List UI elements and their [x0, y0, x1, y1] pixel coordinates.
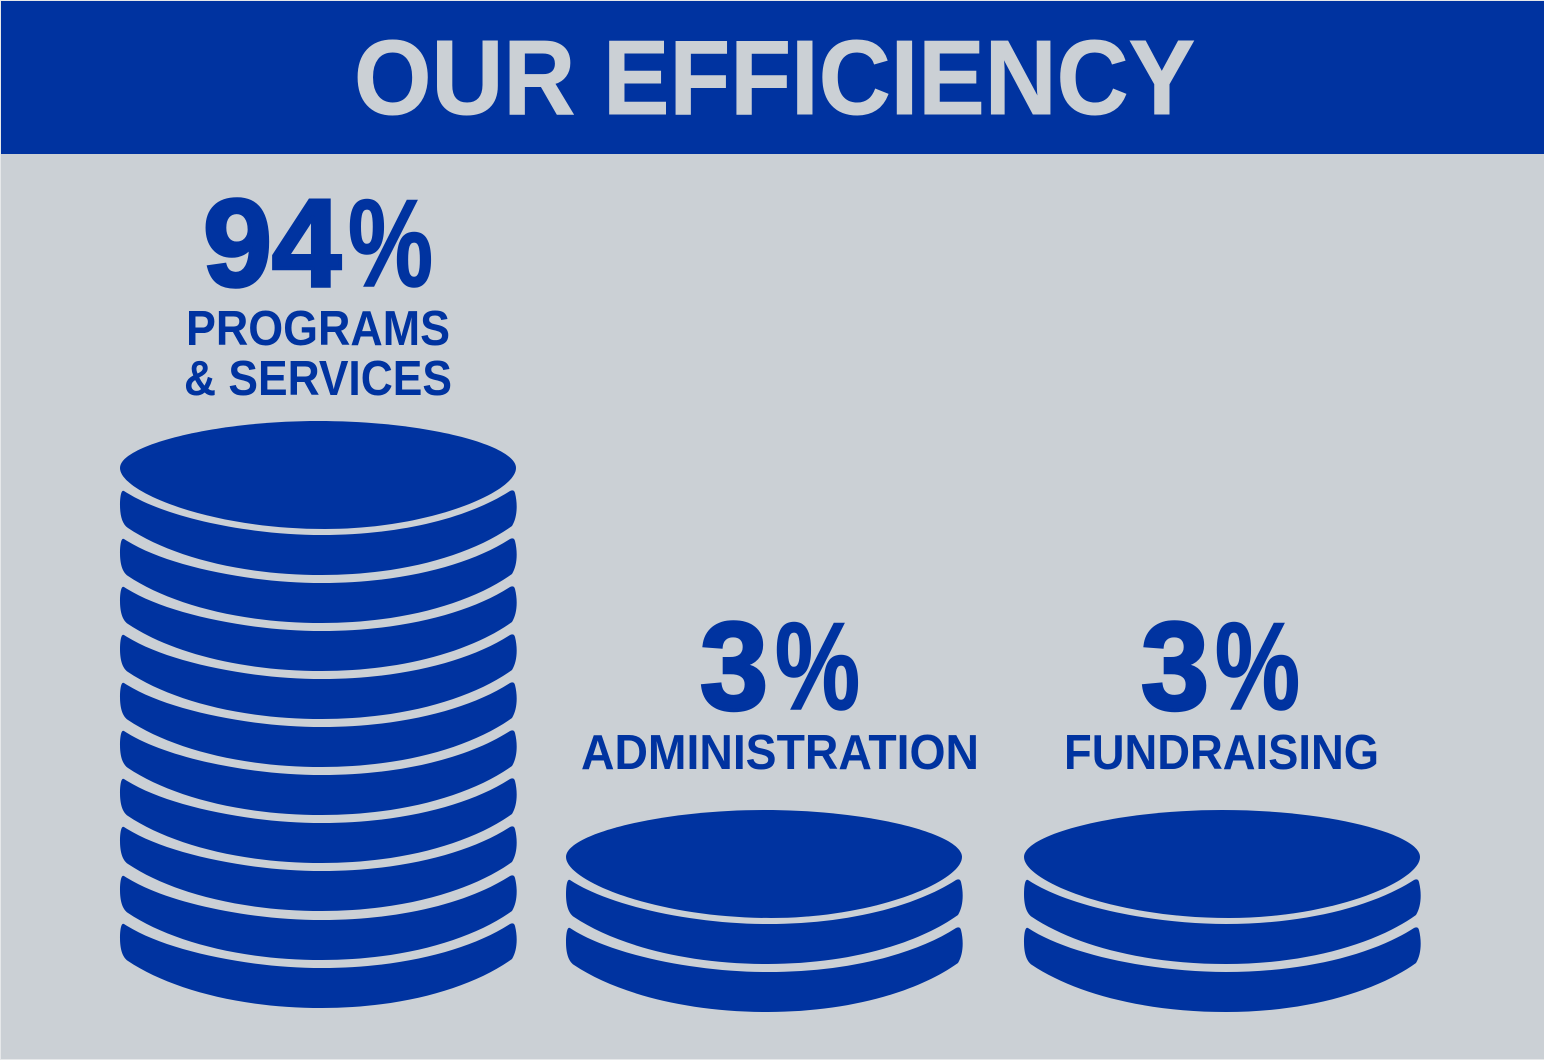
panel: programs and services: [120, 175, 517, 1008]
stat: 3% administration: %: [775, 598, 860, 736]
label: fundraising: FUNDRAISING: [1064, 726, 1379, 780]
panel: administration: [566, 598, 979, 1012]
stat: 3% administration: 3: [700, 598, 768, 736]
stat: 94%: 94: [203, 175, 341, 313]
stat: 3% fundraising: [1141, 598, 1300, 736]
label: administration: ADMINISTRATION: [581, 726, 979, 780]
stat: 94%: [203, 175, 433, 313]
panel: fundraising: [1024, 598, 1421, 1012]
label: programs and services: [184, 302, 452, 406]
icon: stack of three coins: [1024, 810, 1421, 1012]
label: programs and services: PROGRAMS: [186, 302, 450, 356]
icon: stack of three coins: [566, 810, 963, 1012]
stat: 3% administration: [700, 598, 860, 736]
title banner: [1, 1, 1544, 154]
icon: stack of ten coins: [120, 421, 517, 1008]
label: programs and services: & SERVICES: [184, 352, 452, 406]
stat: 94%: %: [348, 175, 433, 313]
title: OUR EFFICIENCY: [354, 19, 1195, 137]
stat: 3% fundraising: 3: [1141, 598, 1209, 736]
stat: 3% fundraising: %: [1215, 598, 1300, 736]
